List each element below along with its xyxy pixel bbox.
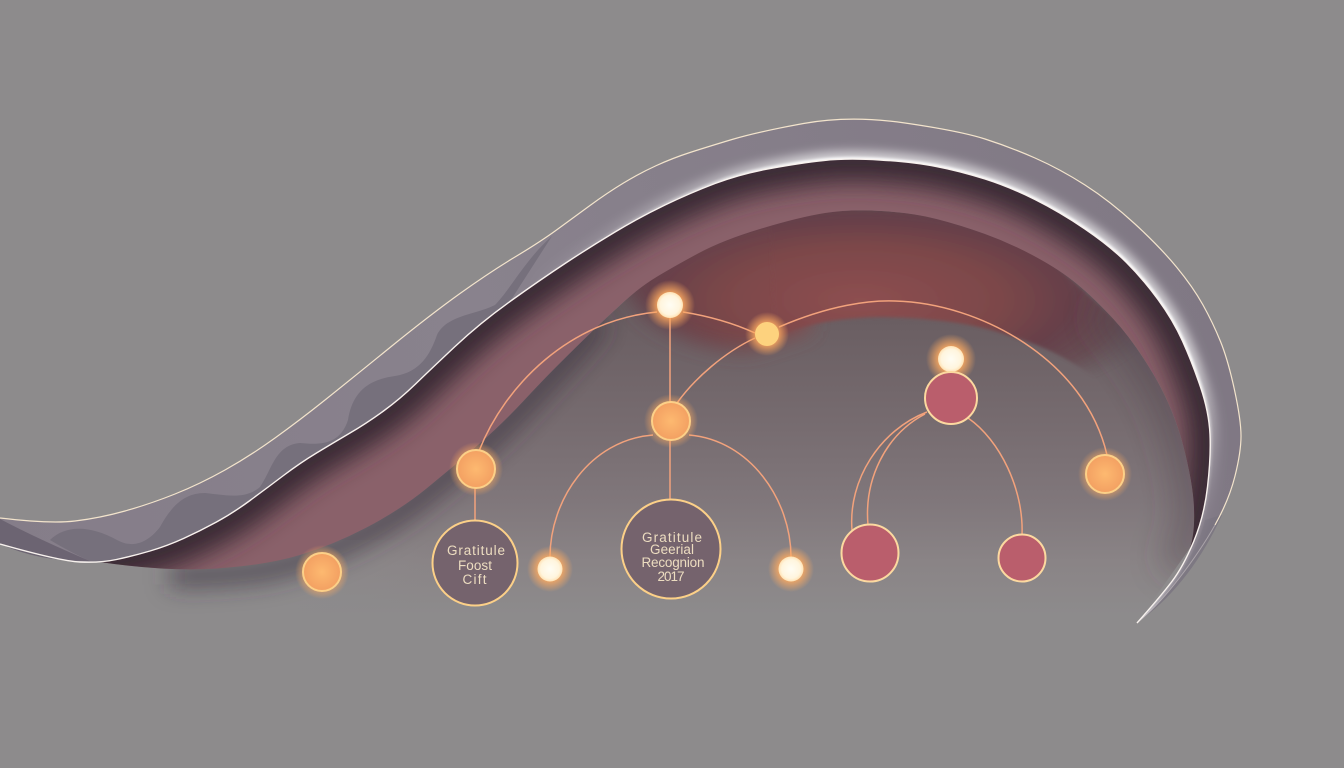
chamber edge shadow, right	[1118, 325, 1194, 576]
labelled node: Gratitule Geerial Recognion 2017: Gratitule	[642, 530, 702, 545]
node: right orange	[1078, 447, 1132, 501]
wavy band on ribbon	[50, 236, 552, 562]
ribbon tail sliver	[1137, 515, 1222, 623]
node: pink top	[925, 372, 977, 424]
labelled node: Gratitule Foost Cift	[432, 520, 518, 606]
chamber edge shadow, left and below	[170, 320, 600, 576]
node: left orange	[449, 442, 503, 496]
labelled node: Gratitule Geerial Recognion 2017	[622, 500, 720, 598]
node: white top right	[926, 334, 976, 384]
node: white left	[527, 546, 573, 592]
soft red glow left of the small node	[610, 195, 810, 350]
node: pink right	[998, 534, 1046, 582]
panel: ribbon	[0, 119, 1241, 623]
node: pink left	[842, 524, 898, 582]
labelled node: Gratitule Geerial Recognion 2017: 2017	[658, 569, 684, 584]
labelled node: Gratitule Foost Cift: Cift	[462, 572, 487, 587]
connector arcs	[475, 301, 1107, 557]
panel: maroon layer	[101, 160, 1210, 570]
labelled node: Gratitule Foost Cift: Foost	[458, 558, 492, 573]
node: top white	[645, 280, 695, 330]
white highlight on inner edge	[552, 145, 1220, 620]
node: white right	[768, 546, 814, 592]
node: bottom-left orange	[295, 545, 349, 599]
ribbon inner line	[0, 159, 1210, 623]
node: centre orange	[644, 394, 698, 448]
ribbon outer line fading tail	[1137, 525, 1215, 623]
labelled node: Gratitule Foost Cift: Gratitule	[447, 543, 505, 558]
labelled node: Gratitule Geerial Recognion 2017: Recognion	[642, 555, 704, 570]
panel: inner chamber	[159, 210, 1194, 601]
labelled node: Gratitule Geerial Recognion 2017: Geerial	[650, 542, 694, 557]
red glow band	[720, 205, 1170, 385]
chamber fade into background at lower left	[60, 540, 430, 655]
ribbon outer line	[0, 119, 1241, 525]
dark tip of ribbon	[0, 519, 90, 561]
node: small orange top	[745, 312, 789, 356]
maroon dark shading along ribbon	[101, 160, 1210, 570]
